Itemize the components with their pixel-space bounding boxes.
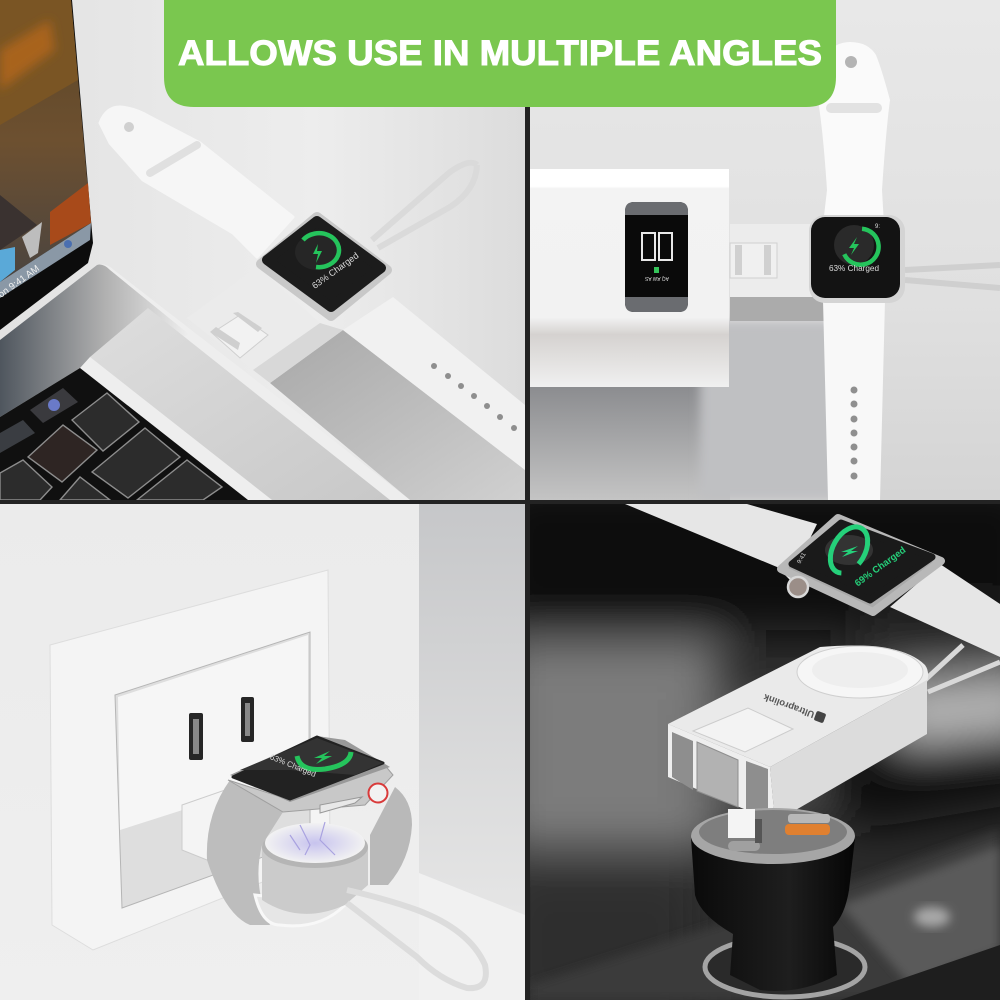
panel: laptop and watch	[0, 0, 525, 500]
band holes	[850, 386, 858, 480]
blurred car interior	[530, 504, 1000, 888]
band holes	[431, 363, 517, 431]
title banner: ALLOWS USE IN MULTIPLE ANGLES	[178, 34, 822, 73]
cable loop	[347, 890, 486, 988]
charger body: Ultraprolink	[762, 691, 816, 720]
car adapter	[691, 808, 865, 997]
watch: 9:	[875, 224, 880, 230]
power bank	[530, 169, 729, 387]
watch: 63% Charged	[829, 264, 879, 273]
laptop screen	[0, 0, 93, 330]
watch band loop	[207, 780, 412, 926]
charger block	[182, 790, 224, 860]
watch: 9:41	[797, 551, 808, 565]
connector	[730, 224, 825, 321]
power bank: AQ AW AS	[644, 275, 669, 281]
wall plate	[50, 570, 330, 950]
watch	[261, 217, 387, 316]
watch: 63% Charged	[269, 752, 317, 779]
charger connector	[210, 312, 342, 383]
panel: wall socket	[0, 504, 525, 1000]
watch band	[100, 107, 525, 470]
watch band	[625, 504, 1000, 657]
charging puck	[262, 822, 368, 914]
watch band	[818, 42, 890, 500]
usb plug	[728, 809, 762, 843]
cables	[905, 265, 1000, 288]
charger body	[668, 645, 928, 822]
console	[530, 830, 1000, 1000]
cables	[925, 645, 1000, 692]
panel: car charger	[530, 504, 1000, 1000]
laptop base	[0, 264, 410, 500]
keyboard	[0, 368, 248, 500]
digital crown	[368, 784, 388, 802]
watch: 63% Charged	[310, 250, 360, 291]
watch	[809, 215, 905, 303]
trackpad	[90, 308, 390, 500]
usb ports	[189, 697, 254, 760]
watch: 69% Charged	[853, 545, 908, 589]
watch	[781, 518, 941, 612]
panel: power bank and watch	[530, 0, 1000, 500]
cable loop	[370, 170, 450, 250]
title banner	[164, 0, 836, 107]
watch	[228, 736, 393, 813]
